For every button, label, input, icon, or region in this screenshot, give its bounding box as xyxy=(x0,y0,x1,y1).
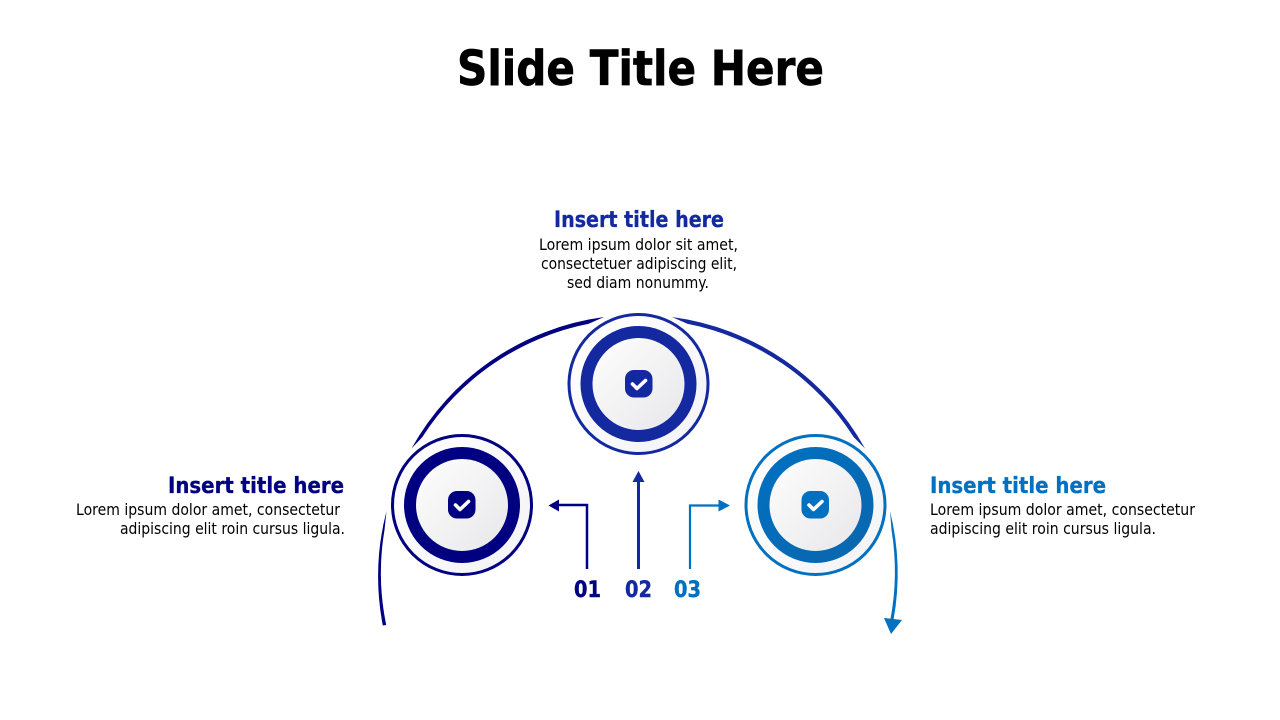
number 03: 03 xyxy=(674,578,701,603)
text block: left xyxy=(76,474,345,538)
text block: top xyxy=(539,208,738,292)
icon: check badge 03 xyxy=(802,491,829,518)
text block: top: sed diam nonummy. xyxy=(567,273,709,292)
node 02 circle xyxy=(569,314,708,454)
arc: lower right xyxy=(890,511,898,620)
number 01: 01 xyxy=(574,578,601,603)
text block: right: Insert title here xyxy=(930,474,1106,499)
arc: upper left xyxy=(412,317,604,448)
text block: left: adipiscing elit roin cursus ligula. xyxy=(120,519,345,538)
arrowhead: lower right xyxy=(884,618,902,634)
text block: right: adipiscing elit roin cursus ligula. xyxy=(930,519,1156,538)
arrow 01 xyxy=(548,500,587,569)
text block: right xyxy=(930,474,1195,538)
arc: upper right xyxy=(672,317,865,448)
text block: right: Lorem ipsum dolor amet, consectetur xyxy=(930,500,1195,519)
text block: top: Lorem ipsum dolor sit amet, xyxy=(539,235,738,254)
node 01 circle xyxy=(392,436,532,574)
text block: left: Lorem ipsum dolor amet, consectetur xyxy=(76,500,340,519)
text block: left: Insert title here xyxy=(168,474,344,499)
arrow 03 xyxy=(690,500,730,569)
icon: check badge 01 xyxy=(448,491,476,518)
icon: check badge 02 xyxy=(625,370,652,398)
number 02: 02 xyxy=(625,578,652,603)
arc: lower left xyxy=(378,511,386,626)
text block: top: consectetuer adipiscing elit, xyxy=(541,254,737,273)
text block: top: Insert title here xyxy=(554,208,724,233)
title: Slide Title Here xyxy=(457,41,824,97)
arrow 02 xyxy=(632,471,644,569)
curved arrow path xyxy=(378,317,902,634)
node 03 circle xyxy=(746,436,885,574)
